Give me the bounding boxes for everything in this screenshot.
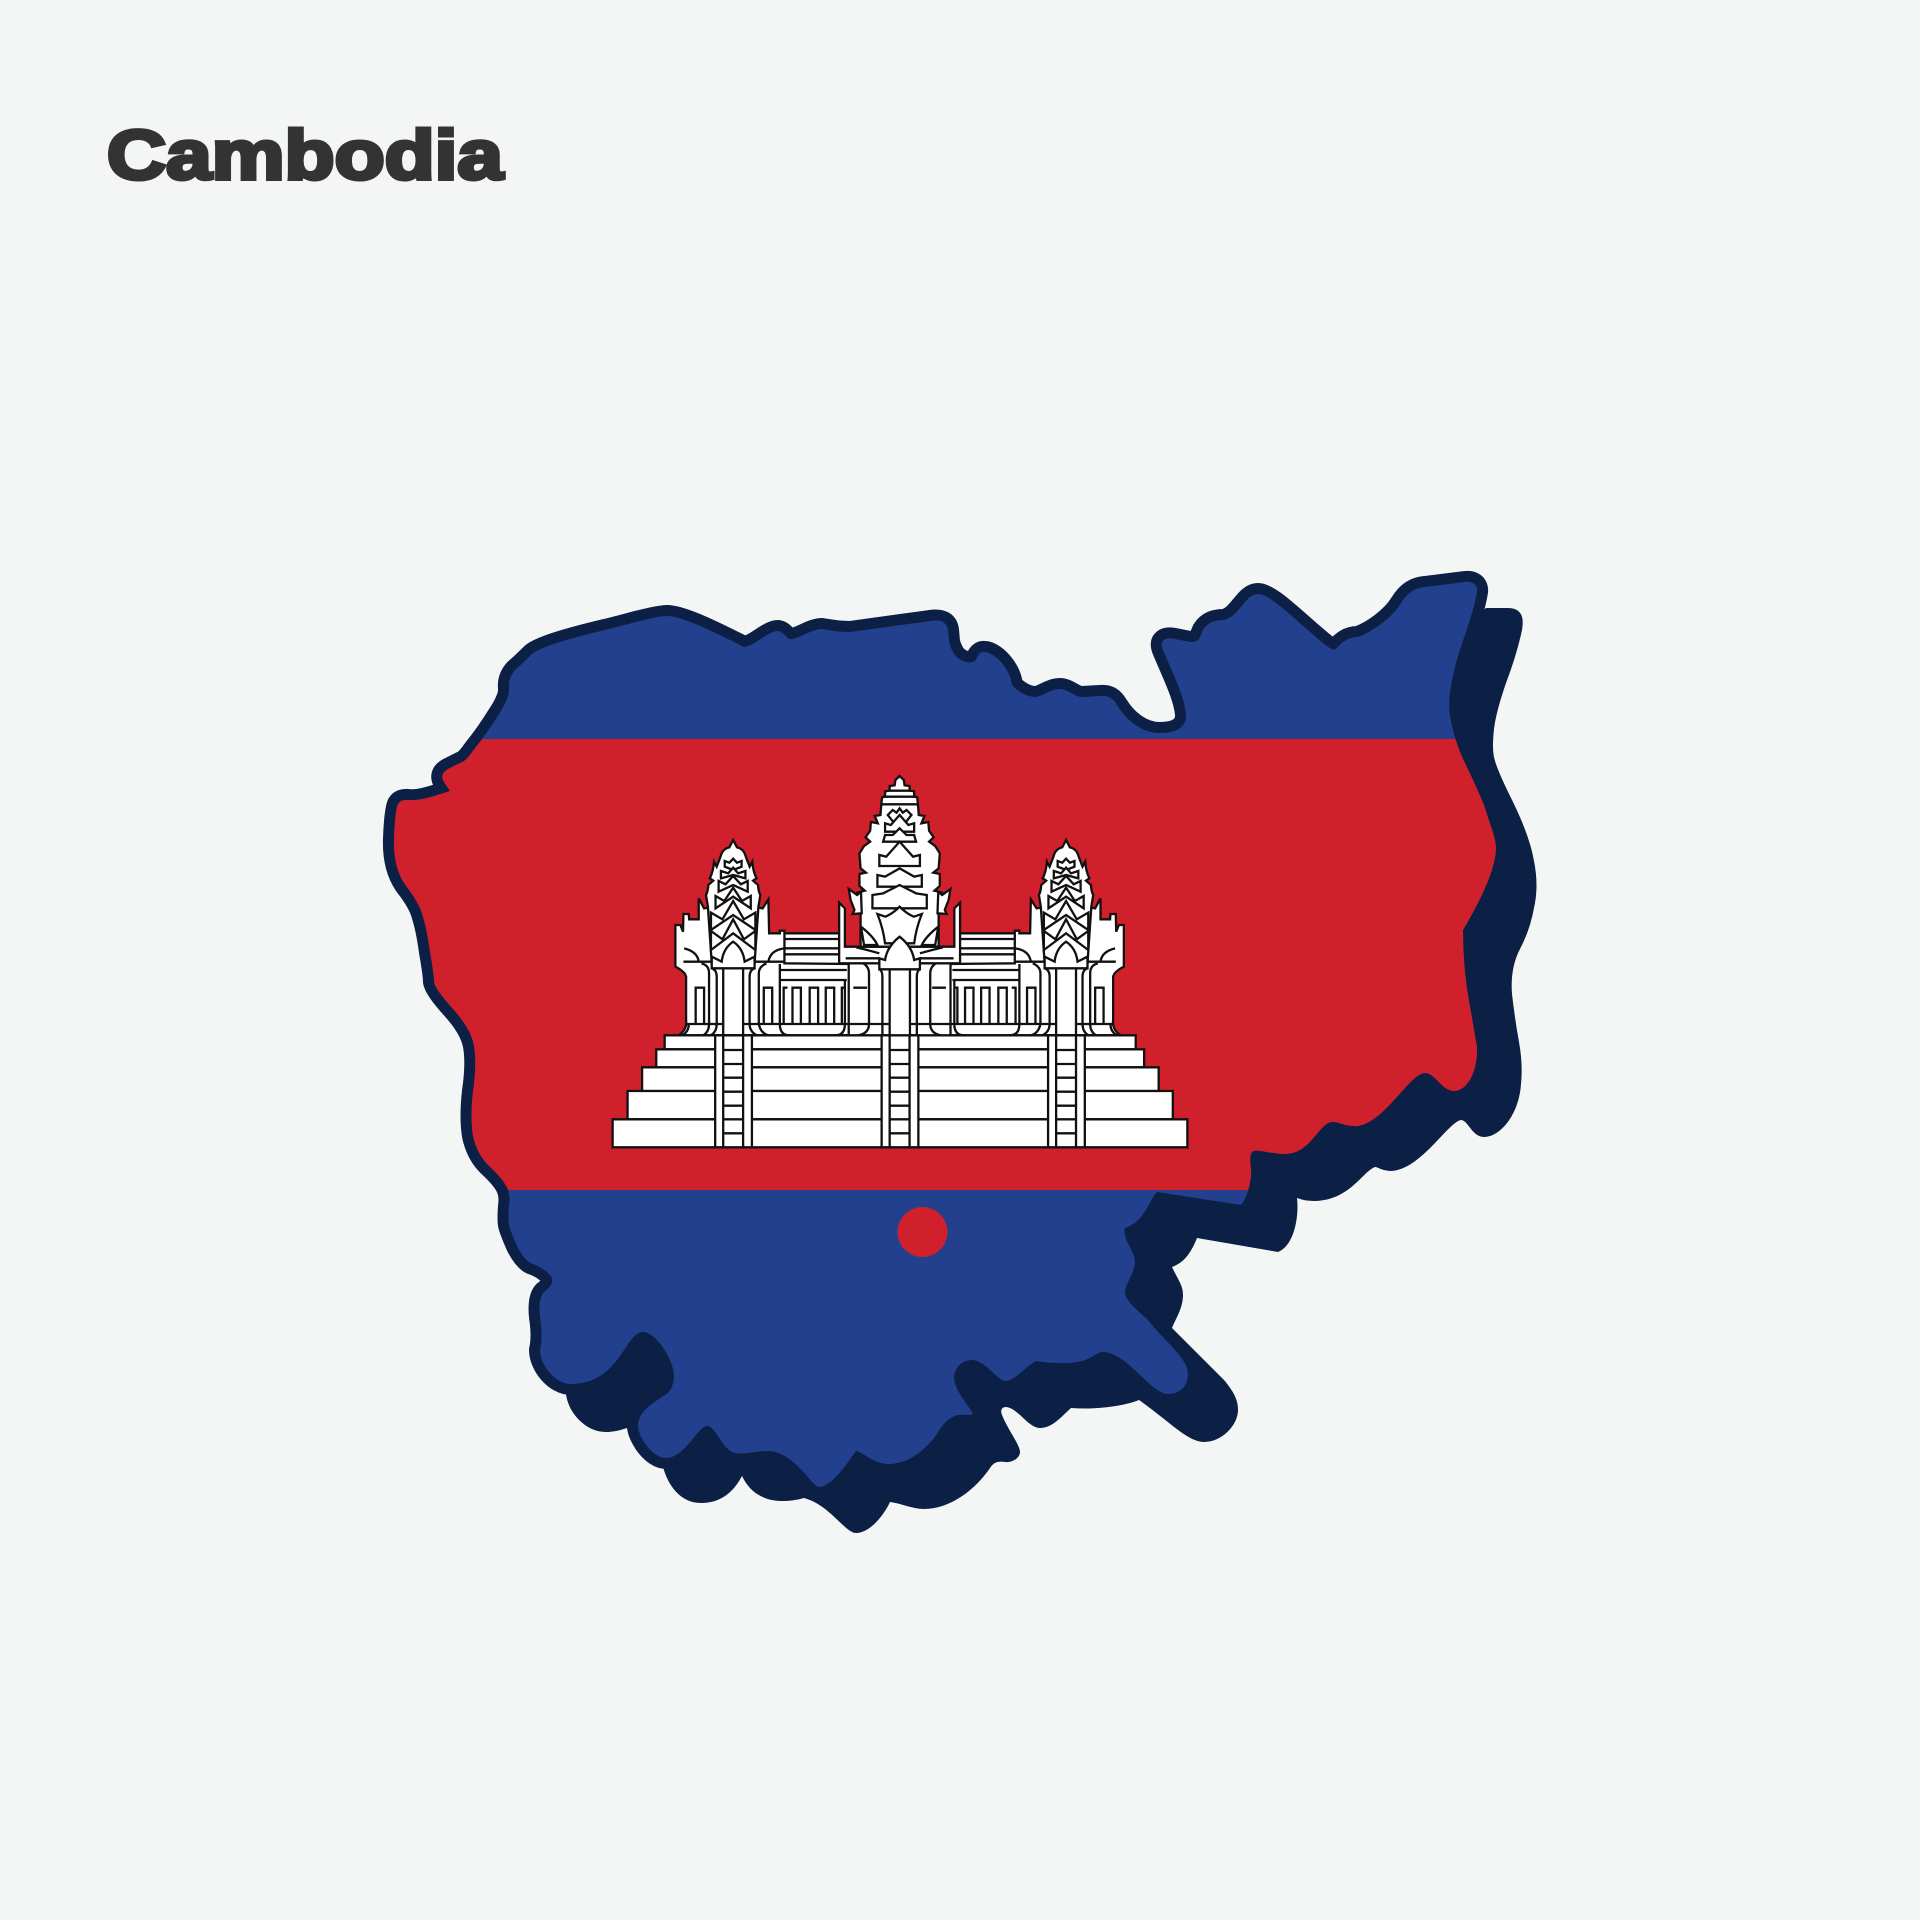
red dot [898,1207,948,1257]
title: Cambodia [107,116,504,194]
emblem: Angkor Wat temple [613,776,1187,1147]
temple terraces [613,1035,1187,1147]
central tower [839,776,960,1035]
right half of temple [897,840,1124,1035]
map outline and blue bands [394,582,1496,1487]
left half of temple [675,840,902,1035]
map: Cambodia flag-filled silhouette [380,582,1536,1533]
temple staircases [715,1035,1085,1147]
red central band [380,739,1520,1190]
map drop shadow [566,608,1536,1533]
